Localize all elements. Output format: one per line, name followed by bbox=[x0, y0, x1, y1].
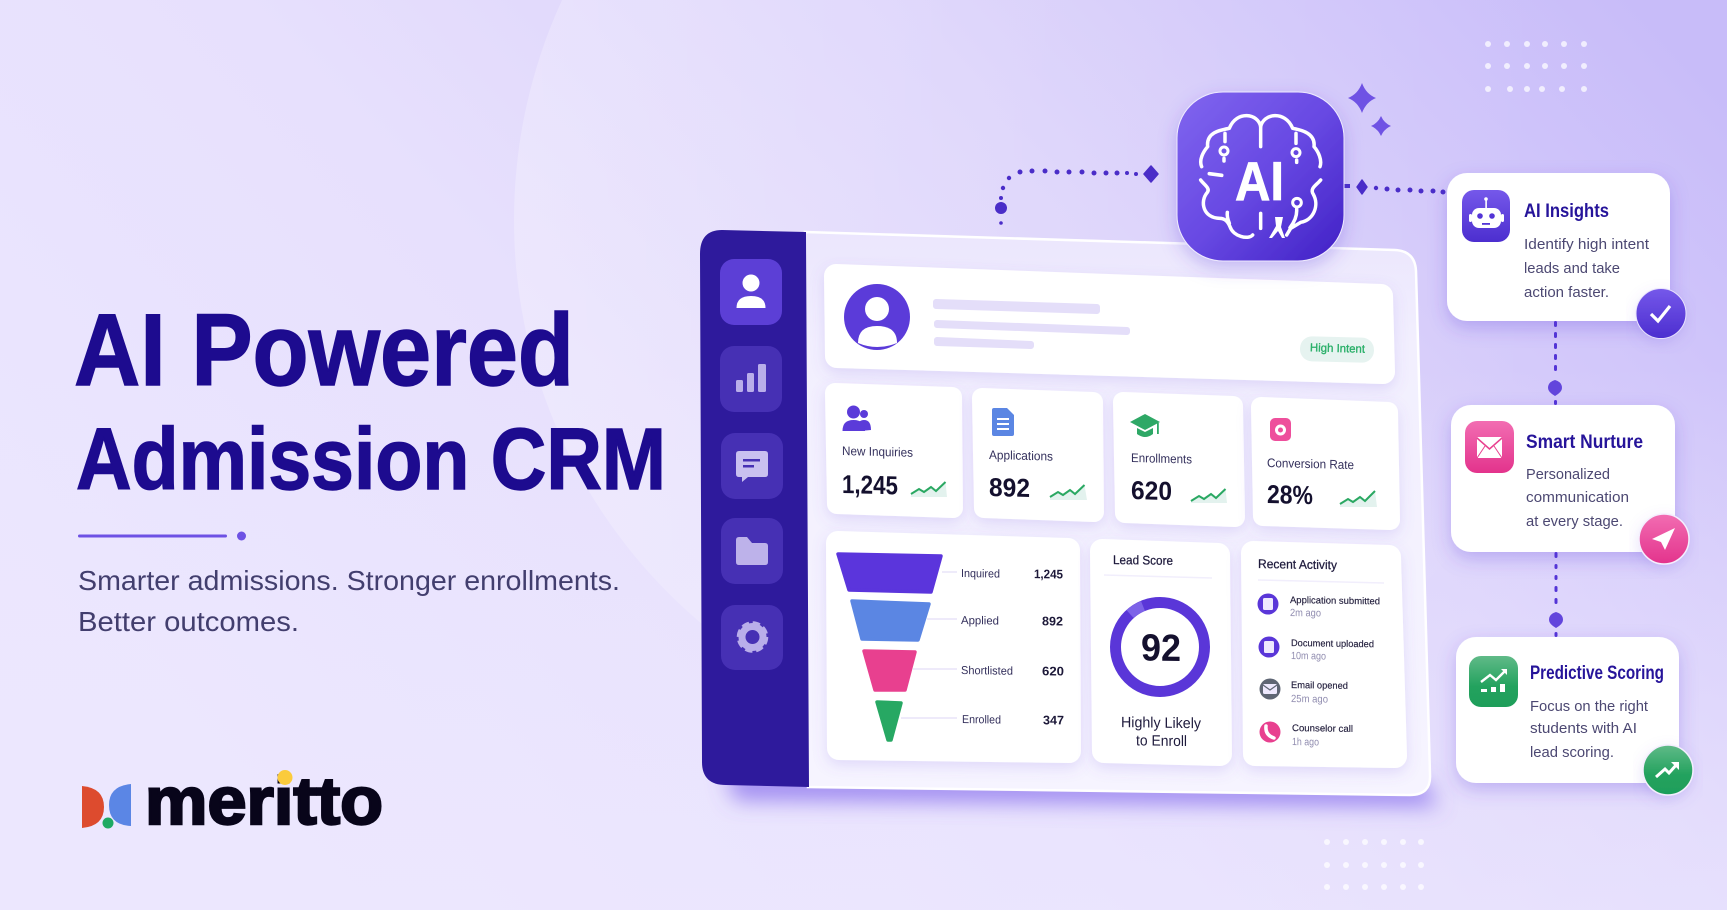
icon: document bbox=[992, 408, 1014, 436]
decorative dots: top right bbox=[1485, 41, 1587, 92]
funnel labels: Shortlisted bbox=[961, 665, 1013, 678]
recent activity panel: Counselor call bbox=[1292, 723, 1353, 735]
KPI card: conversion rate: 28% bbox=[1267, 479, 1313, 510]
badge: trending arrow bbox=[1643, 745, 1693, 795]
funnel panel bbox=[838, 543, 1069, 751]
small figure bbox=[1269, 217, 1285, 238]
funnel labels: 1,245 bbox=[1034, 567, 1063, 582]
lead score panel: to Enroll bbox=[1136, 732, 1187, 750]
funnel chart bbox=[838, 554, 941, 740]
funnel labels: 347 bbox=[1043, 713, 1064, 728]
AI Insights text: AI Insights bbox=[1524, 201, 1609, 222]
badge: check bbox=[1636, 288, 1686, 338]
logo: meritto bbox=[82, 764, 383, 839]
title: Admission CRM bbox=[76, 411, 666, 508]
sidebar icon: chart bbox=[720, 346, 782, 412]
icon: growth chart bbox=[1469, 656, 1518, 707]
card: Predictive Scoring bbox=[1456, 637, 1693, 795]
KPI card: applications: 892 bbox=[989, 472, 1030, 503]
funnel labels: 620 bbox=[1042, 664, 1064, 679]
dotted connector: Smart Nurture to Predictive Scoring bbox=[1549, 552, 1563, 637]
dashboard bbox=[700, 230, 1430, 795]
KPI card: enrollments: 620 bbox=[1131, 475, 1172, 506]
card: AI Insights bbox=[1447, 173, 1686, 338]
KPI card: enrollments: Enrollments bbox=[1131, 451, 1192, 467]
recent activity panel: 2m ago bbox=[1290, 607, 1321, 619]
icon: target badge bbox=[1270, 418, 1291, 441]
icon: robot bbox=[1462, 190, 1510, 242]
avatar bbox=[844, 284, 910, 350]
dotted connector: left of AI icon bbox=[995, 166, 1158, 225]
subtitle: Smarter admissions. Stronger enrollments. bbox=[78, 565, 620, 596]
funnel labels: 892 bbox=[1042, 614, 1063, 629]
sparkline bbox=[1340, 491, 1377, 507]
profile header card bbox=[836, 276, 1383, 372]
funnel labels bbox=[961, 566, 1064, 728]
lead score panel: Lead Score bbox=[1113, 553, 1173, 568]
sidebar icon: messages bbox=[721, 433, 783, 499]
subtitle: Better outcomes. bbox=[78, 606, 299, 637]
funnel labels: Enrolled bbox=[962, 714, 1001, 727]
dashboard shadow bbox=[725, 772, 1438, 806]
Predictive Scoring text: students with AI bbox=[1530, 720, 1637, 737]
KPI card: applications bbox=[982, 398, 1094, 512]
logo yellow dot bbox=[278, 770, 292, 785]
placeholder text bars bbox=[936, 302, 1127, 346]
AI Insights text bbox=[1524, 201, 1650, 301]
sparkles bbox=[1348, 83, 1391, 136]
Smart Nurture text: communication bbox=[1526, 489, 1629, 506]
KPI card: enrollments bbox=[1123, 402, 1235, 517]
lead score panel: Highly Likely bbox=[1121, 714, 1201, 732]
sparkline bbox=[911, 482, 947, 497]
icon: graduation cap bbox=[1130, 414, 1160, 437]
sparkline bbox=[1050, 485, 1087, 500]
sparkline bbox=[1191, 489, 1227, 503]
Predictive Scoring text: lead scoring. bbox=[1530, 744, 1614, 761]
decorative dots: bottom bbox=[1324, 839, 1424, 890]
AI Insights text: action faster. bbox=[1524, 284, 1609, 301]
high intent badge: High Intent bbox=[1310, 342, 1366, 356]
circuit nodes bbox=[1220, 147, 1301, 207]
recent activity panel: 25m ago bbox=[1291, 693, 1328, 706]
Predictive Scoring text: Focus on the right bbox=[1530, 698, 1649, 715]
Smart Nurture text: Personalized bbox=[1526, 466, 1610, 483]
recent activity panel: Application submitted bbox=[1290, 595, 1380, 607]
activity icons bbox=[1258, 594, 1280, 742]
KPI card: conversion rate: Conversion Rate bbox=[1267, 456, 1354, 472]
title: AI Powered bbox=[74, 293, 574, 407]
recent activity panel: Document uploaded bbox=[1291, 638, 1374, 650]
Smart Nurture text: at every stage. bbox=[1526, 513, 1623, 530]
AI Insights text: leads and take bbox=[1524, 260, 1620, 277]
sidebar bbox=[700, 230, 809, 787]
logo mark bbox=[82, 784, 131, 828]
KPI card: conversion rate bbox=[1261, 407, 1390, 520]
high intent badge bbox=[1300, 336, 1374, 363]
AI brain icon bbox=[1177, 92, 1344, 261]
KPI card: new inquiries: New Inquiries bbox=[842, 444, 913, 460]
Smart Nurture text bbox=[1526, 432, 1643, 530]
KPI card: applications: Applications bbox=[989, 448, 1053, 464]
recent activity panel bbox=[1253, 553, 1395, 756]
funnel labels: Inquired bbox=[961, 568, 1000, 581]
brain outline bbox=[1201, 116, 1321, 237]
lead score panel: 92 bbox=[1141, 627, 1181, 670]
dotted connector: AI Insights to Smart Nurture bbox=[1548, 321, 1562, 405]
card: Smart Nurture bbox=[1451, 405, 1689, 564]
recent activity panel: 1h ago bbox=[1292, 736, 1319, 748]
recent activity panel: 10m ago bbox=[1291, 650, 1326, 663]
divider with dot bbox=[78, 532, 246, 540]
lead score panel bbox=[1102, 551, 1220, 754]
Smart Nurture text: Smart Nurture bbox=[1526, 432, 1643, 453]
title bbox=[74, 293, 666, 508]
sidebar icon: profile bbox=[720, 259, 782, 325]
dotted connector: right of AI icon bbox=[1344, 180, 1446, 194]
sidebar icon: settings bbox=[721, 605, 783, 670]
Predictive Scoring text bbox=[1530, 663, 1664, 761]
funnel labels: Applied bbox=[961, 615, 999, 628]
score ring bbox=[1116, 602, 1204, 692]
AI Insights text: Identify high intent bbox=[1524, 236, 1650, 253]
dashboard panel bbox=[805, 232, 1430, 795]
badge: paper plane bbox=[1639, 514, 1689, 564]
Predictive Scoring text: Predictive Scoring bbox=[1530, 663, 1664, 684]
recent activity panel: Email opened bbox=[1291, 680, 1348, 692]
sidebar icon: folder bbox=[721, 518, 783, 584]
logo wordmark: meritto bbox=[145, 764, 383, 839]
icon: people bbox=[842, 406, 871, 431]
AI label: AI bbox=[1235, 150, 1284, 212]
icon: mail bbox=[1465, 421, 1514, 473]
connector lines bbox=[901, 572, 957, 718]
KPI card: new inquiries bbox=[835, 393, 953, 508]
KPI card: new inquiries: 1,245 bbox=[842, 469, 898, 500]
recent activity panel: Recent Activity bbox=[1258, 557, 1338, 572]
subtitle bbox=[78, 565, 620, 637]
